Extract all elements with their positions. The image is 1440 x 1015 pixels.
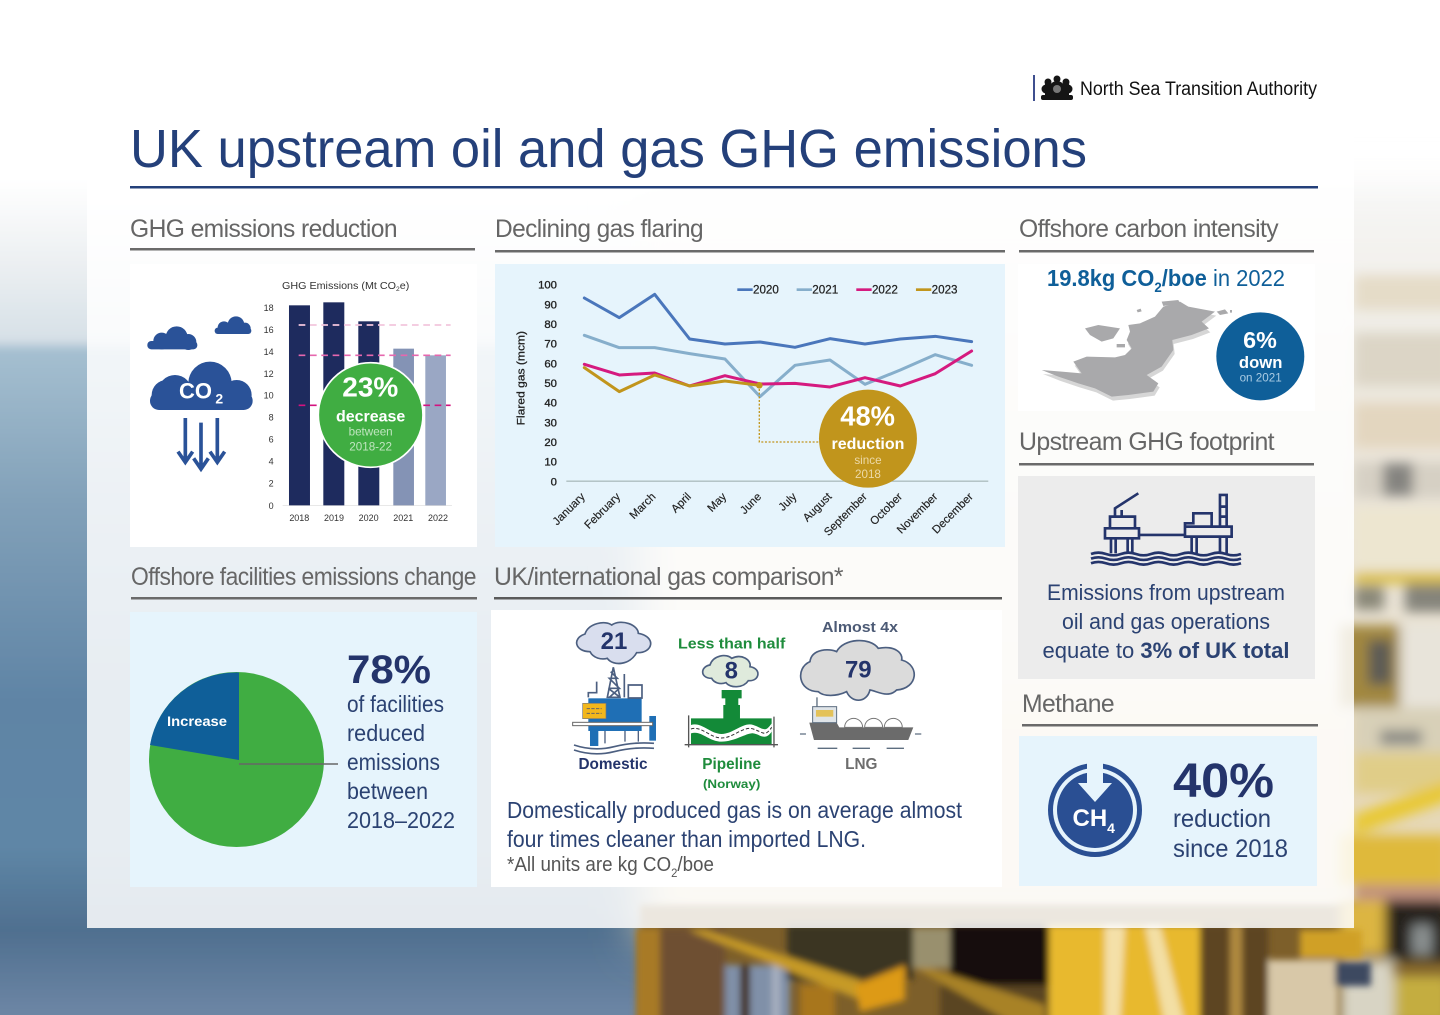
icon: pipeline Norway: 8	[725, 658, 738, 685]
icon: domestic platform: Domestic	[578, 756, 648, 773]
text: gas comparison note: *All units are kg CO	[507, 854, 682, 876]
bar chart: GHG emissions 2018-2022: 14	[264, 347, 274, 357]
panel: Offshore carbon intensity	[1018, 264, 1315, 411]
bar chart: GHG emissions 2018-2022: 2	[396, 287, 400, 293]
panel: Offshore facilities emissions change	[130, 612, 477, 887]
icon: pipeline Norway	[678, 636, 785, 791]
callout: 48% reduction: reduction	[832, 436, 904, 453]
callout: 48% reduction: 48%	[840, 400, 895, 431]
line chart: flared gas by month: 10	[544, 457, 557, 469]
icon: domestic platform	[573, 622, 656, 773]
line chart: flared gas by month: January	[551, 491, 588, 528]
callout: 23% decrease: 2018-22	[349, 441, 392, 454]
text: emissions share: Emissions from upstream	[1047, 580, 1285, 605]
bar chart: GHG emissions 2018-2022: GHG Emissions (Mt CO	[282, 281, 384, 292]
bar chart: GHG emissions 2018-2022: 6	[269, 435, 274, 445]
bar chart: GHG emissions 2018-2022: 0	[269, 501, 274, 511]
line chart: flared gas by month: 2022	[872, 283, 898, 296]
stat: 40% reduction: 40%	[1173, 755, 1274, 808]
icon: LNG tanker: Almost 4x	[822, 620, 899, 636]
text: gas comparison note: Domestically produced gas is on average almost	[507, 797, 963, 823]
line chart: flared gas by month: February	[583, 491, 623, 531]
line chart: flared gas by month: 80	[544, 319, 557, 331]
text: emissions share	[1042, 580, 1290, 663]
line chart: flared gas by month	[515, 280, 988, 539]
bar chart: GHG emissions 2018-2022: 10	[264, 391, 274, 401]
bar chart: GHG emissions 2018-2022: 12	[264, 369, 274, 379]
bar chart: GHG emissions 2018-2022: 18	[264, 303, 274, 313]
icon: LNG tanker: LNG	[845, 756, 877, 773]
right strip details	[1354, 275, 1440, 310]
line chart: flared gas by month: 2023	[932, 283, 958, 296]
panel: Upstream GHG footprint	[1018, 476, 1315, 679]
line chart: flared gas by month: July	[777, 491, 800, 514]
heading: Offshore carbon intensity: Offshore carbon intensity	[1019, 215, 1279, 243]
line chart: flared gas by month: 30	[544, 417, 557, 429]
line chart: flared gas by month: November	[895, 491, 941, 536]
stat: 78% of facilities: reduced	[347, 720, 425, 746]
stat: 78% of facilities: of facilities	[347, 691, 444, 717]
bar chart: GHG emissions 2018-2022: 2019	[324, 513, 344, 523]
callout: 23% decrease: between	[349, 425, 393, 438]
logo: North Sea Transition Authority: North Sea Transition Authority	[1080, 79, 1317, 100]
logo: North Sea Transition Authority	[1033, 75, 1317, 101]
line chart: flared gas by month: April	[669, 491, 694, 515]
stat: 19.8kg CO2/boe in 2022: 2	[1154, 279, 1162, 295]
line chart: flared gas by month: September	[822, 491, 870, 539]
icon: CH4 ring: 4	[1107, 820, 1115, 836]
icon: CH4 ring	[1050, 760, 1140, 854]
line chart: flared gas by month: 40	[544, 398, 557, 410]
stat: 78% of facilities: emissions	[347, 749, 440, 775]
icon: LNG tanker	[800, 620, 921, 773]
text: gas comparison note: 2	[671, 866, 678, 880]
panel: UK/international gas comparison	[491, 610, 1002, 887]
map: UK	[1042, 300, 1232, 401]
panel: Methane	[1019, 736, 1317, 886]
bottom band details	[636, 928, 660, 1015]
bar chart: GHG emissions 2018-2022: 2022	[428, 513, 448, 523]
bar chart: GHG emissions 2018-2022: 2	[269, 479, 274, 489]
stat: 78% of facilities: 2018–2022	[347, 807, 455, 833]
callout: 6% down: on 2021	[1240, 371, 1282, 384]
icon: pipeline Norway: (Norway)	[703, 777, 760, 791]
icon: CO2 clouds and arrows: 2	[215, 390, 223, 406]
panel: Declining gas flaring	[495, 264, 1005, 547]
text: gas comparison note	[507, 797, 963, 880]
line chart: flared gas by month: December	[930, 491, 976, 536]
bar chart: GHG emissions 2018-2022: 2020	[359, 513, 379, 523]
callout: 6% down	[1216, 312, 1304, 400]
line chart: flared gas by month: 60	[544, 358, 557, 370]
icon: domestic platform: 21	[601, 628, 627, 655]
text: emissions share: equate to 3% of UK total	[1042, 638, 1290, 663]
stat: 40% reduction: since 2018	[1173, 835, 1288, 863]
callout: 23% decrease: 23%	[342, 372, 398, 403]
callout: 48% reduction	[819, 390, 917, 488]
line chart: flared gas by month: June	[738, 491, 764, 517]
callout: 48% reduction: 2018	[855, 468, 881, 481]
heading: GHG emissions reduction: GHG emissions reduction	[130, 215, 397, 243]
icon: offshore platform	[1091, 493, 1241, 565]
stat: 19.8kg CO2/boe in 2022: /boe	[1162, 265, 1207, 291]
bar chart: GHG emissions 2018-2022: 2018	[289, 513, 309, 523]
line chart: flared gas by month: 2021	[812, 283, 838, 296]
bar chart: GHG emissions 2018-2022: e)	[400, 281, 409, 292]
line chart: flared gas by month: May	[705, 491, 729, 515]
heading: UK/international gas comparison: UK/international gas comparison*	[494, 563, 844, 591]
line chart: flared gas by month: 100	[538, 280, 557, 292]
bar chart: GHG emissions 2018-2022: 8	[269, 413, 274, 423]
line chart: flared gas by month: Flared gas (mcm)	[515, 331, 527, 425]
icon: CH4 ring: CH	[1072, 805, 1107, 832]
bar chart: GHG emissions 2018-2022: 16	[264, 325, 274, 335]
stat: 19.8kg CO2/boe in 2022: 19.8kg CO	[1047, 265, 1154, 291]
icon: pipeline Norway: Less than half	[678, 636, 785, 652]
icon: CO2 clouds and arrows	[147, 316, 253, 469]
callout: 23% decrease: decrease	[336, 408, 405, 425]
text: emissions share: oil and gas operations	[1062, 609, 1270, 634]
translucent main panel	[87, 100, 1354, 928]
line chart: flared gas by month: October	[868, 491, 905, 528]
text: gas comparison note: four times cleaner than imported LNG.	[507, 826, 866, 852]
pie chart: 78% reduced: Increase	[167, 713, 227, 729]
callout: 6% down: down	[1239, 353, 1282, 372]
text: gas comparison note: /boe	[677, 854, 714, 876]
line chart: flared gas by month: 70	[544, 339, 557, 351]
stat: 78% of facilities: 78%	[347, 648, 431, 692]
bar chart: GHG emissions 2018-2022	[264, 281, 452, 523]
line chart: flared gas by month: 2020	[753, 283, 779, 296]
line chart: flared gas by month: 50	[544, 378, 557, 390]
line chart: flared gas by month: 0	[551, 476, 557, 488]
callout: 23% decrease	[318, 363, 423, 467]
stat: 40% reduction	[1173, 755, 1288, 863]
stat: 19.8kg CO2/boe in 2022: in 2022	[1213, 265, 1289, 291]
line chart: flared gas by month: March	[628, 491, 658, 522]
stat: 40% reduction: reduction	[1173, 805, 1271, 833]
heading: Offshore facilities emissions change: Offshore facilities emissions change	[131, 563, 476, 591]
stat: 78% of facilities	[347, 648, 455, 833]
callout: 6% down: 6%	[1243, 327, 1277, 353]
line chart: flared gas by month: 90	[544, 299, 557, 311]
line chart: flared gas by month: 20	[544, 437, 557, 449]
heading: Methane: Methane	[1022, 690, 1114, 718]
pie chart: 78% reduced	[149, 672, 338, 847]
line chart: flared gas by month: August	[801, 490, 835, 524]
icon: pipeline Norway: Pipeline	[702, 756, 761, 773]
bar chart: GHG emissions 2018-2022: 2021	[393, 513, 413, 523]
stat: 78% of facilities: between	[347, 778, 428, 804]
bar chart: GHG emissions 2018-2022: 4	[269, 457, 274, 467]
panel: GHG emissions reduction	[130, 264, 477, 547]
heading: Declining gas flaring: Declining gas flaring	[495, 215, 703, 243]
icon: CO2 clouds and arrows: CO	[179, 379, 212, 404]
heading: Upstream GHG footprint: Upstream GHG footprint	[1019, 428, 1275, 456]
icon: LNG tanker: 79	[845, 656, 872, 683]
title: UK upstream oil and gas GHG emissions	[130, 119, 1087, 179]
callout: 48% reduction: since	[854, 454, 882, 467]
